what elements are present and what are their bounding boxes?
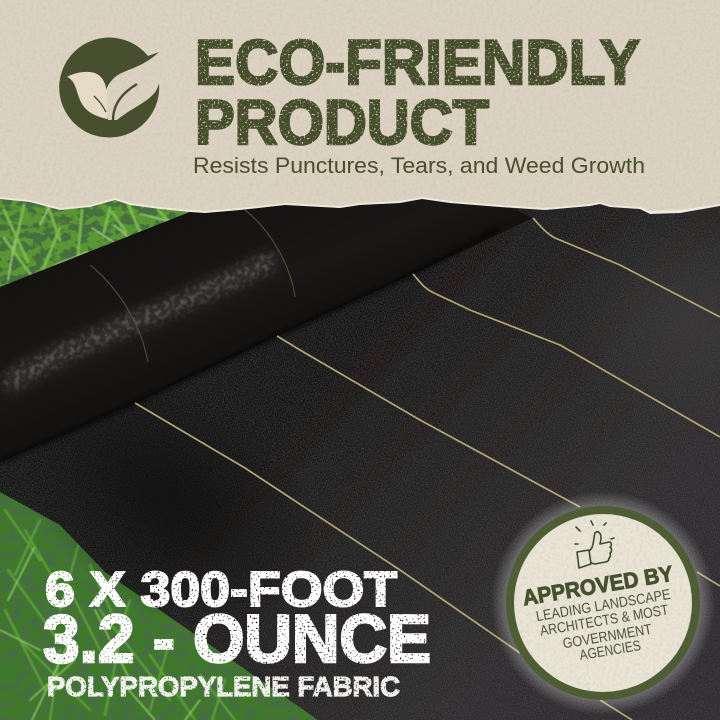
badge body text [535, 587, 672, 664]
product specs text: 3.2 - OUNCE [43, 601, 431, 677]
title [195, 28, 640, 158]
badge body text: GOVERNMENT [562, 622, 653, 652]
icon: thumbs up [575, 521, 614, 568]
approved by heading: APPROVED BY [521, 561, 675, 610]
badge body text: AGENCIES [578, 638, 642, 664]
badge body text: ARCHITECTS & MOST [539, 602, 670, 640]
product specs text [43, 563, 431, 702]
product specs text: POLYPROPYLENE FABRIC [47, 671, 400, 702]
gold stripes [135, 218, 720, 720]
roll stitch lines [90, 210, 295, 362]
roll worn highlight [5, 258, 275, 385]
title: PRODUCT [195, 88, 489, 158]
title: ECO-FRIENDLY [195, 28, 640, 98]
product specs text: 6 X 300-FOOT [45, 563, 397, 617]
badge body text: LEADING LANDSCAPE [535, 587, 672, 625]
torn paper header [0, 0, 720, 214]
dark lower left cloth [0, 312, 372, 688]
fabric sheet [0, 195, 720, 720]
logo: leaf emblem [59, 38, 159, 138]
badge: approved by [491, 491, 715, 715]
roll flecks [5, 258, 275, 385]
grass background [0, 190, 340, 720]
subtitle: Resists Punctures, Tears, and Weed Growth [193, 153, 645, 178]
cream leaf [67, 72, 107, 119]
fold shadows [0, 228, 500, 462]
lighter upper right cloth [560, 210, 720, 430]
rolled fabric [0, 195, 533, 462]
